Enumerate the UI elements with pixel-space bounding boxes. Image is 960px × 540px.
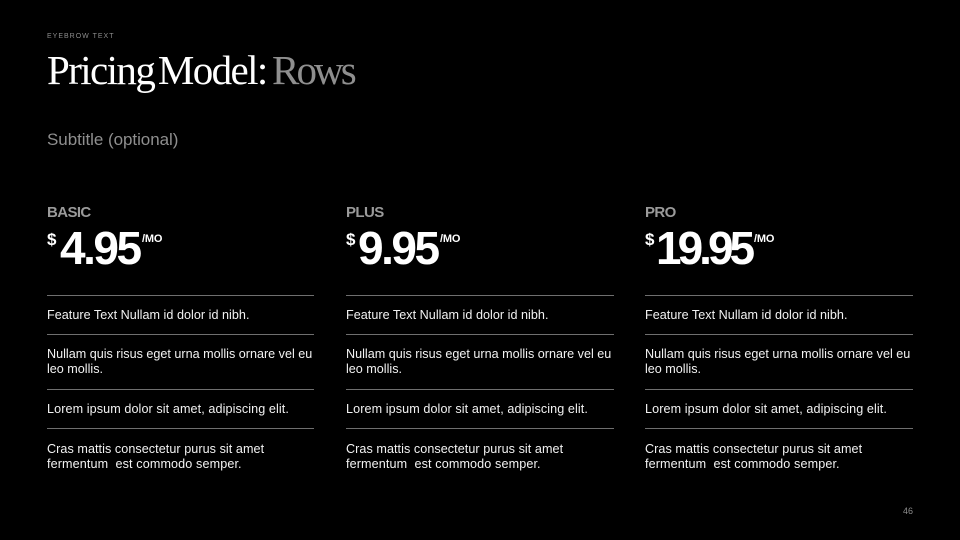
feature 3: Lorem ipsum dolor sit amet, adipiscing elit. xyxy=(346,402,588,416)
price: basic xyxy=(47,222,162,274)
feature 3: Lorem ipsum dolor sit amet, adipiscing elit. xyxy=(47,402,289,416)
feature 4 xyxy=(346,428,614,471)
price: basic: /MO xyxy=(142,233,162,245)
panel: pro plan xyxy=(645,204,913,471)
feature 2: Nullam quis risus eget urna mollis ornare vel eu xyxy=(645,347,910,361)
feature 2 xyxy=(47,334,314,376)
feature 4: Cras mattis consectetur purus sit amet xyxy=(47,442,264,456)
panel: plus plan xyxy=(346,204,614,471)
plan name: pro: PRO xyxy=(645,204,676,221)
price: plus: 9.95 xyxy=(358,222,438,274)
price: plus: $ xyxy=(346,230,355,249)
feature 4: Cras mattis consectetur purus sit amet xyxy=(645,442,862,456)
title: Rows xyxy=(272,47,354,93)
title: Pricing Model: xyxy=(47,47,267,93)
feature 3: Lorem ipsum dolor sit amet, adipiscing elit. xyxy=(645,402,887,416)
price: basic: 4.95 xyxy=(60,222,140,274)
panel: basic plan xyxy=(47,204,314,471)
feature 2: leo mollis. xyxy=(645,362,701,376)
price: plus xyxy=(346,222,460,274)
price: pro: /MO xyxy=(754,233,774,245)
eyebrow text: EYEBROW TEXT xyxy=(47,33,114,40)
feature 2 xyxy=(645,334,913,376)
plan name: plus: PLUS xyxy=(346,204,384,221)
feature 4: Cras mattis consectetur purus sit amet xyxy=(346,442,563,456)
subtitle: Subtitle (optional) xyxy=(47,130,178,149)
feature 4: fermentum est commodo semper. xyxy=(645,457,840,471)
page number: 46 xyxy=(903,506,913,516)
feature 2: Nullam quis risus eget urna mollis ornare vel eu xyxy=(346,347,611,361)
plan name: basic: BASIC xyxy=(47,204,91,221)
feature 4 xyxy=(47,428,314,471)
price: pro: $ xyxy=(645,230,654,249)
feature 4 xyxy=(645,428,913,471)
feature 4: fermentum est commodo semper. xyxy=(346,457,541,471)
feature 1: Feature Text Nullam id dolor id nibh. xyxy=(346,308,548,322)
feature 2: leo mollis. xyxy=(47,362,103,376)
feature 1: Feature Text Nullam id dolor id nibh. xyxy=(47,308,249,322)
feature 1: Feature Text Nullam id dolor id nibh. xyxy=(645,308,847,322)
price: pro: 19.95 xyxy=(656,222,751,274)
feature 2 xyxy=(346,334,614,376)
feature 2: Nullam quis risus eget urna mollis ornare vel eu xyxy=(47,347,312,361)
feature 2: leo mollis. xyxy=(346,362,402,376)
feature 4: fermentum est commodo semper. xyxy=(47,457,242,471)
price: basic: $ xyxy=(47,230,56,249)
price: plus: /MO xyxy=(440,233,460,245)
